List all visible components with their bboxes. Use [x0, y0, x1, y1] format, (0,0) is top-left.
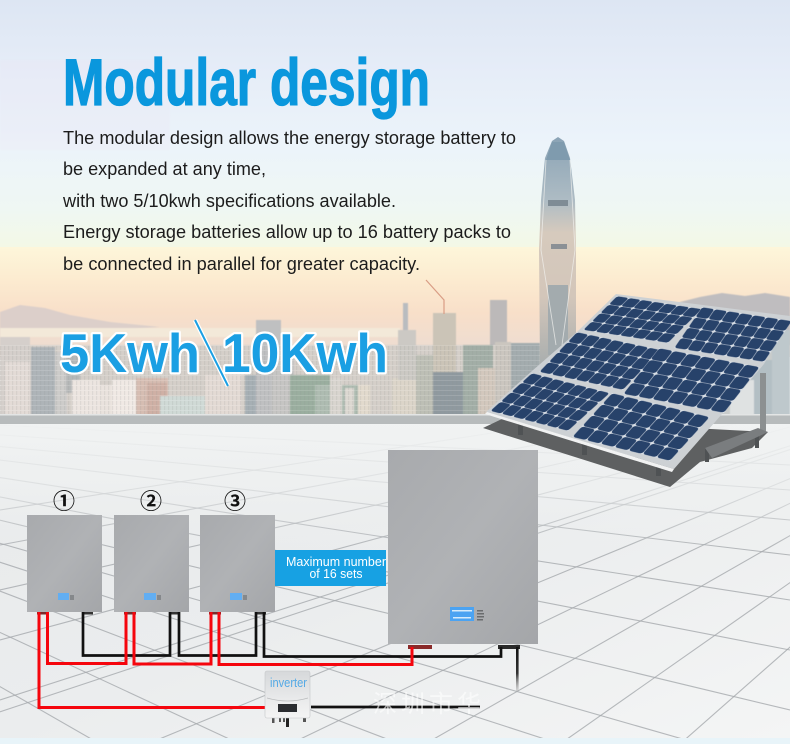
- capacity heading: [60, 320, 388, 386]
- inverter: [265, 671, 310, 727]
- skyscraper: [539, 137, 576, 365]
- description text: Energy storage batteries allow up to 16 battery packs to: [63, 222, 511, 242]
- capacity heading: 10Kwh: [222, 322, 388, 384]
- number labels: [53, 489, 246, 514]
- title: Modular design: [63, 45, 430, 119]
- ground shadow: [483, 418, 768, 487]
- solar array: [483, 294, 790, 487]
- construction crane: [426, 280, 444, 314]
- number labels: ③: [224, 489, 246, 514]
- tiled roof floor: [0, 424, 790, 738]
- battery 2: [114, 515, 189, 614]
- description text: be expanded at any time,: [63, 159, 266, 179]
- inverter: inverter: [270, 675, 308, 690]
- description text: [62, 128, 516, 274]
- number labels: ②: [140, 489, 162, 514]
- sky background: [0, 0, 790, 357]
- watermark: 深圳市华: [373, 684, 481, 719]
- black cables: [83, 612, 501, 707]
- battery 3: [200, 515, 275, 614]
- support legs: [518, 373, 768, 476]
- callout: maximum sets: Maximum number: [286, 555, 386, 569]
- capacity heading: 5Kwh: [60, 322, 200, 384]
- distant mountains: [0, 293, 790, 345]
- red cables: [39, 612, 412, 708]
- battery 1: [27, 515, 102, 614]
- city window texture: [0, 345, 540, 415]
- description text: be connected in parallel for greater capacity.: [63, 254, 420, 274]
- description text: with two 5/10kwh specifications available.: [62, 191, 396, 211]
- main battery: [388, 450, 538, 649]
- panel modules: [490, 296, 790, 461]
- parapet wall: [0, 414, 790, 425]
- city skyline: [0, 300, 790, 415]
- number labels: ①: [53, 489, 75, 514]
- fading cable: [516, 647, 519, 691]
- description text: The modular design allows the energy storage battery to: [63, 128, 516, 148]
- bottom strip: [0, 738, 790, 744]
- callout: maximum sets: of 16 sets: [310, 567, 362, 581]
- callout: maximum sets: [275, 550, 386, 586]
- frame: [486, 294, 790, 469]
